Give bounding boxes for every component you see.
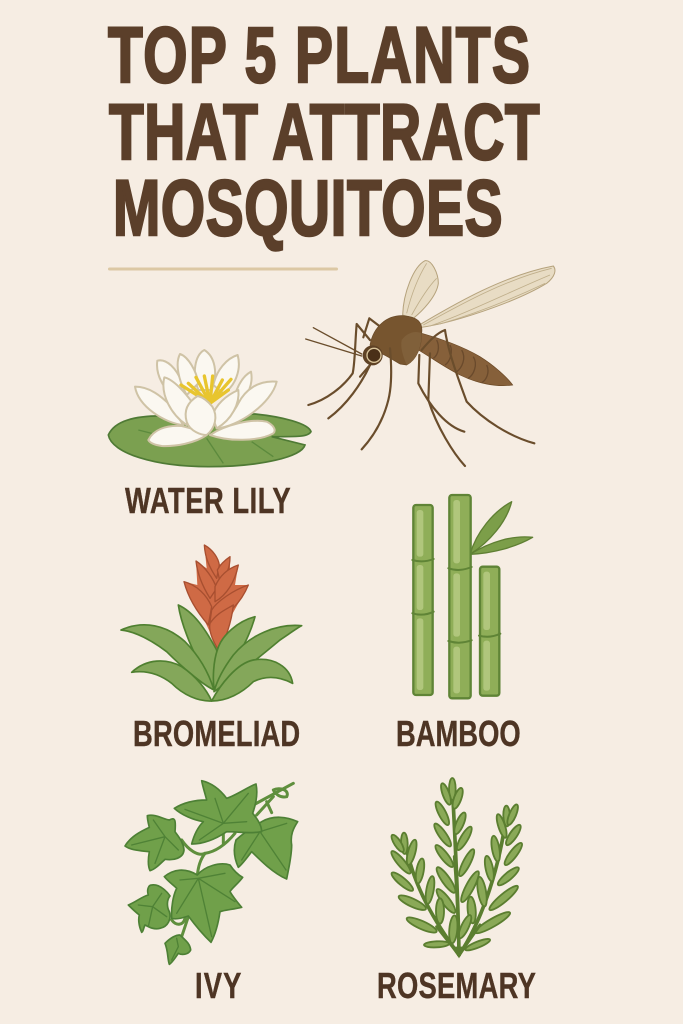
icon: rosemary <box>389 778 524 958</box>
panel: bromeliad <box>121 545 302 754</box>
label: rosemary: ROSEMARY <box>377 965 536 1006</box>
icon: bamboo <box>412 495 533 698</box>
panel: rosemary <box>377 778 536 1006</box>
illustration: mosquito <box>306 261 555 466</box>
title: MOSQUITOES <box>113 164 503 252</box>
title: THAT ATTRACT <box>109 88 540 176</box>
label: water lily: WATER LILY <box>125 480 291 521</box>
label: ivy: IVY <box>195 965 241 1006</box>
panel: water lily <box>108 350 311 521</box>
title: TOP 5 PLANTS <box>108 11 530 99</box>
label: bamboo: BAMBOO <box>396 713 521 754</box>
icon: water lily <box>108 350 311 467</box>
title <box>108 11 540 252</box>
panel: ivy <box>125 781 298 1006</box>
panel: bamboo <box>396 495 533 754</box>
icon: ivy <box>125 781 298 964</box>
label: bromeliad: BROMELIAD <box>133 713 300 754</box>
icon: bromeliad <box>121 545 302 701</box>
